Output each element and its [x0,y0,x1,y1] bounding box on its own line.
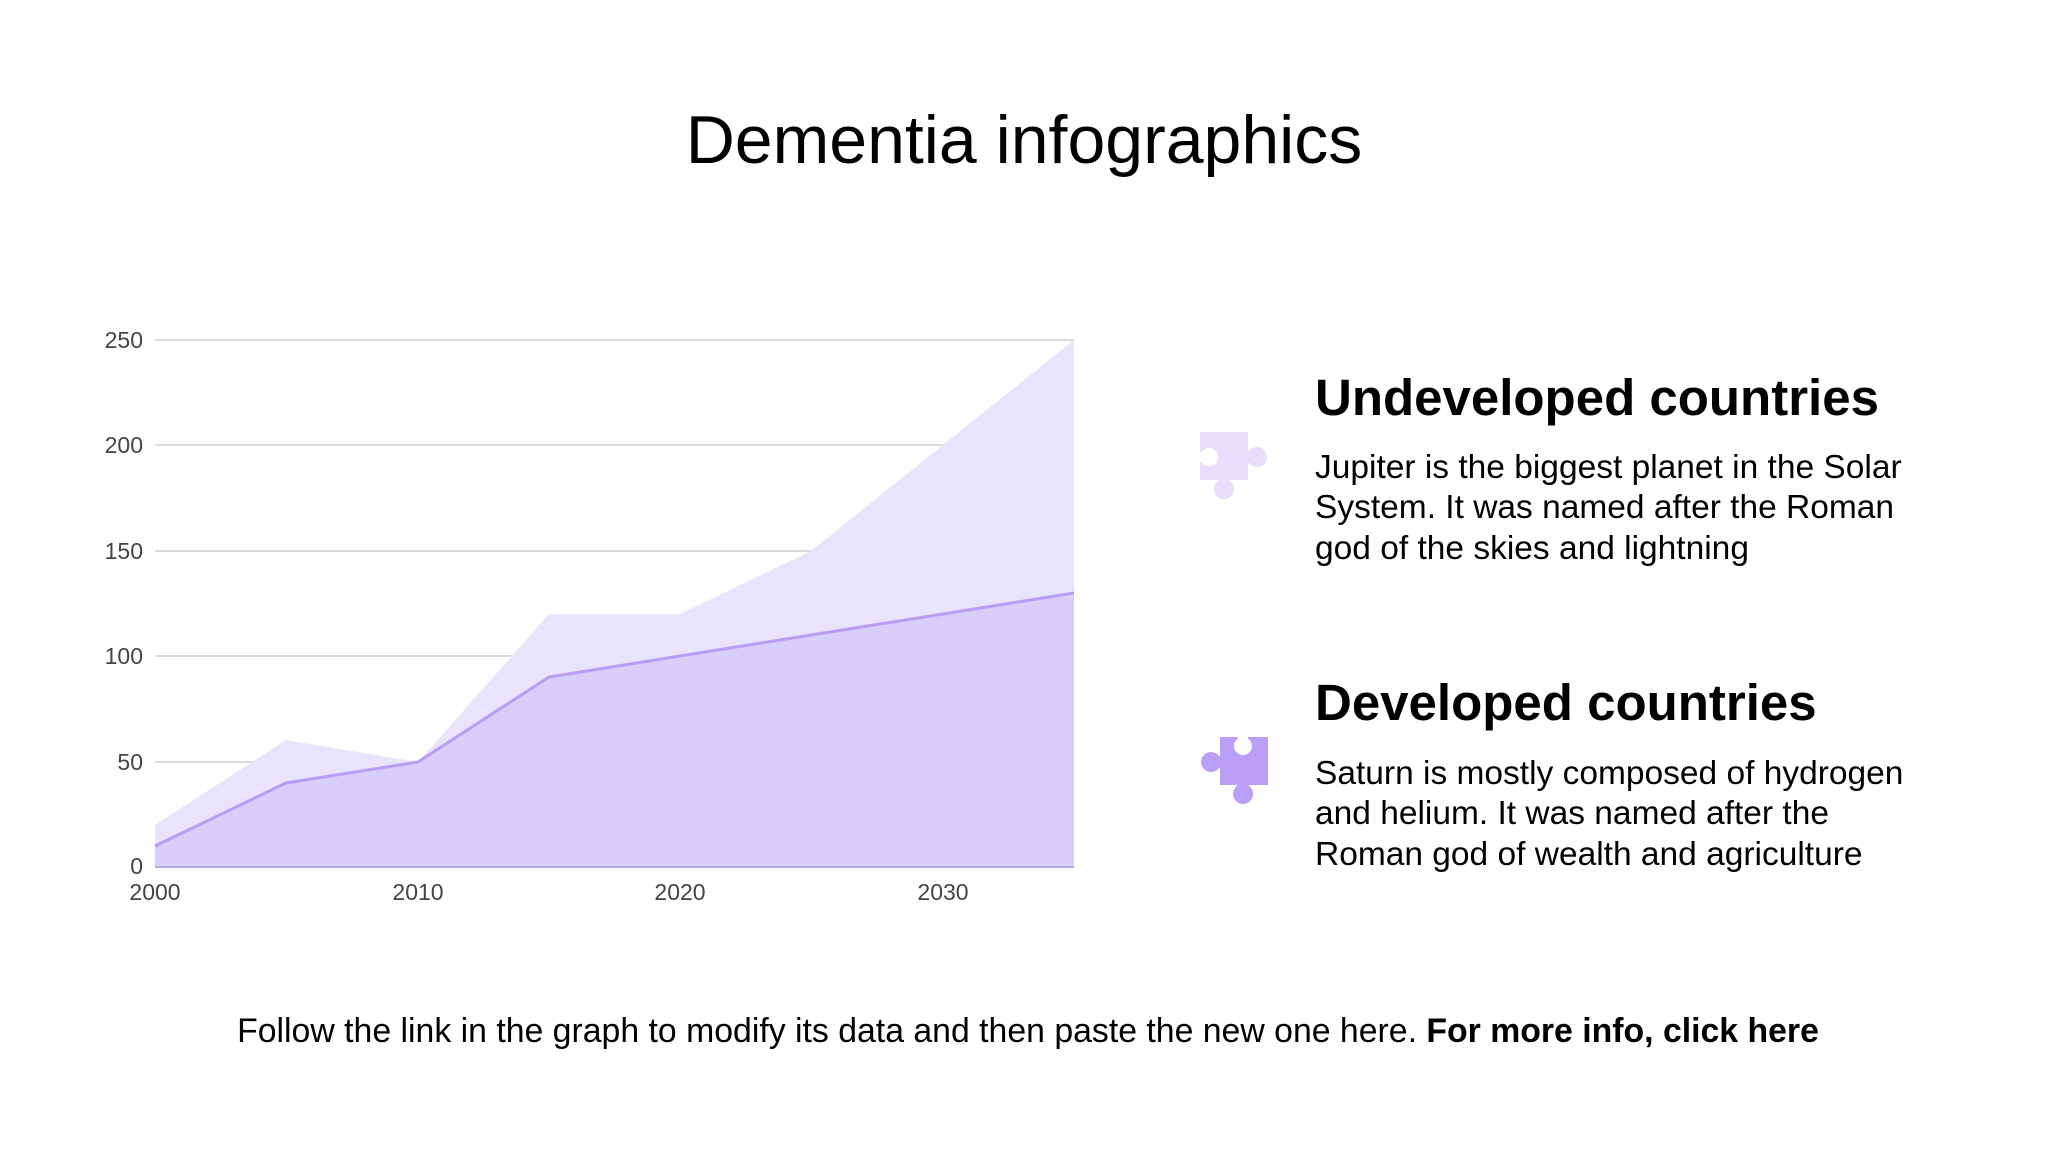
y axis labels: 150 [105,538,143,564]
y axis labels: 0 [130,853,143,879]
heading: developed countries: Developed countries [1315,674,1817,731]
icon: dark puzzle piece [1201,735,1268,804]
x axis labels: 2000 [129,879,181,905]
y axis labels: 250 [105,327,143,353]
x axis labels: 2020 [654,879,706,905]
y axis labels: 100 [105,643,143,669]
text block: undeveloped description: Jupiter is the biggest planet in the Solar [1315,449,1902,486]
text block: developed description: and helium. It was named after the [1315,795,1829,832]
heading: undeveloped countries: Undeveloped countries [1315,369,1879,426]
series: undeveloped countries area [155,340,1074,867]
y axis labels [105,327,143,879]
icon: light puzzle piece [1198,432,1267,499]
text block: developed description [1315,755,1903,873]
y axis labels: 200 [105,432,143,458]
text block: undeveloped description [1315,449,1902,567]
title: Dementia infographics [686,102,1362,178]
text block: developed description: Roman god of wealth and agriculture [1315,836,1862,873]
x axis labels: 2030 [917,879,969,905]
x axis labels: 2010 [392,879,444,905]
footer text: Follow the link in the graph to modify its data and then paste the new one here. For more info, click here [237,1012,1819,1050]
y axis labels: 50 [117,749,143,775]
text block: developed description: Saturn is mostly composed of hydrogen [1315,755,1903,792]
text block: undeveloped description: System. It was named after the Roman [1315,489,1894,526]
text block: undeveloped description: god of the skies and lightning [1315,530,1749,567]
series: developed countries area [155,593,1074,867]
x axis labels [129,879,969,905]
area chart [105,327,1074,905]
